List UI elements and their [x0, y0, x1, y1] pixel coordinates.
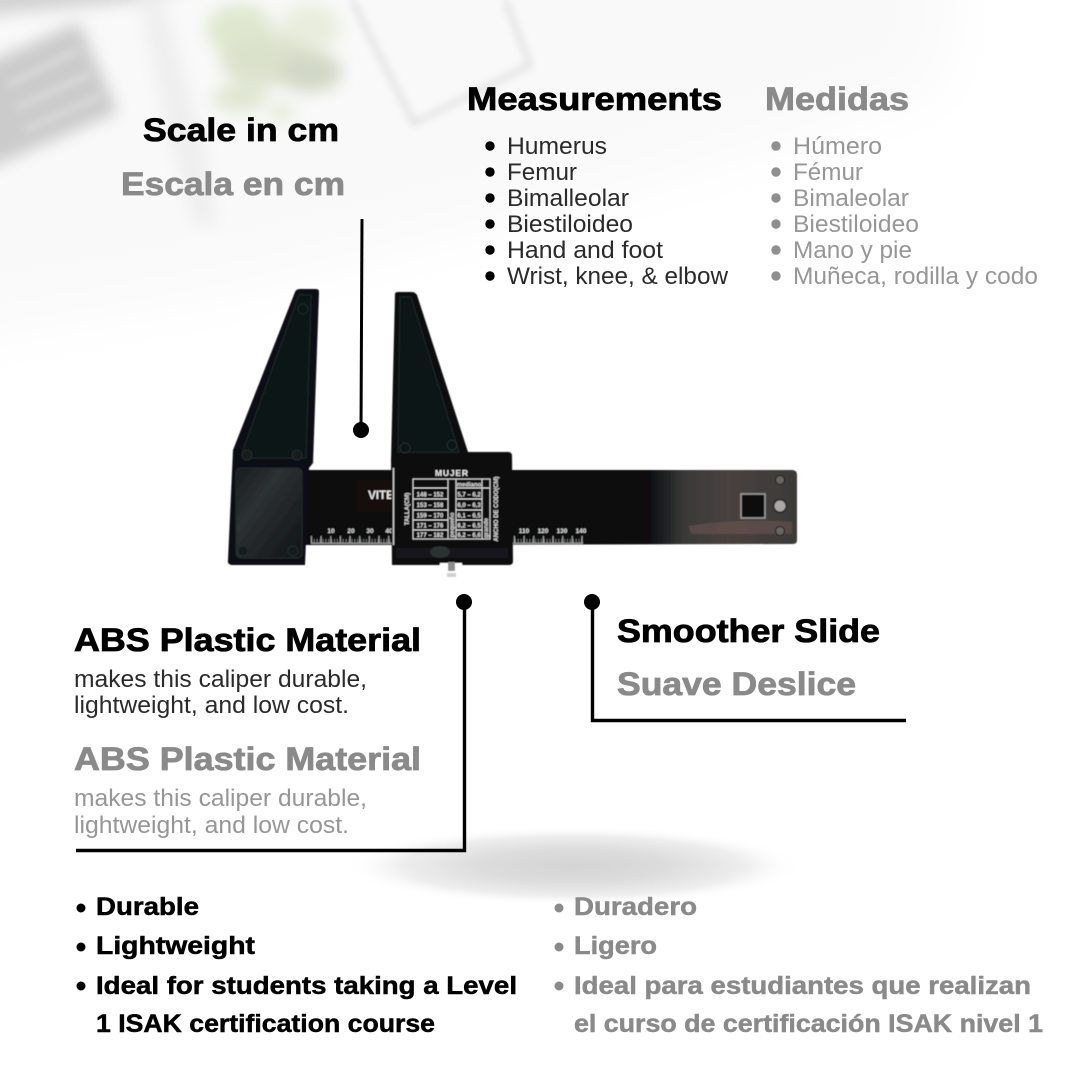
sliding jaw with size table: 6,0 – 6,3	[457, 503, 481, 509]
sliding jaw with size table: 177 – 182	[417, 533, 444, 539]
bullet list: benefits English: Ideal for students taking a Level	[96, 972, 517, 1000]
bullet list: benefits Spanish	[555, 893, 1043, 1038]
bullet list: benefits English: 1 ISAK certification course	[96, 1010, 435, 1038]
heading: Scale in cm: Escala en cm	[121, 166, 345, 202]
sliding jaw with size table: MUJER	[435, 468, 468, 478]
beam with scale: 130	[557, 528, 568, 535]
panel: measurements in Spanish: Fémur	[793, 159, 863, 186]
sliding jaw with size table: mediano	[457, 482, 482, 488]
arrow: ABS material pointer	[76, 594, 472, 850]
panel: measurements in Spanish: Húmero	[793, 133, 882, 160]
sliding jaw with size table: 171 – 176	[417, 524, 444, 530]
text block: ABS plastic material Spanish column	[74, 741, 421, 839]
sliding jaw with size table: 148 – 152	[417, 492, 444, 498]
bullet list: benefits English: Lightweight	[96, 932, 256, 960]
sliding jaw with size table: 159 – 170	[417, 514, 444, 520]
panel: measurements in English: Biestiloideo	[507, 211, 633, 238]
caliper photo	[228, 289, 797, 577]
bullet list: benefits English	[77, 893, 517, 1038]
beam with scale: 110	[519, 528, 530, 535]
heading: Smoother Slide: Suave Deslice	[617, 666, 856, 702]
beam with scale: 120	[538, 528, 549, 535]
sliding jaw with size table: 6,2 – 6,5	[457, 524, 481, 530]
panel: measurements in English: Bimalleolar	[507, 185, 629, 212]
panel: measurements in English: Measurements	[467, 81, 722, 117]
beam with scale: 40	[385, 528, 393, 535]
text block: ABS plastic material English: ABS Plastic Material	[74, 622, 421, 658]
beam with scale: 10	[327, 528, 335, 535]
beam with scale	[305, 470, 797, 545]
table-top shadow	[343, 826, 803, 906]
panel: measurements in Spanish: Biestiloideo	[793, 211, 919, 238]
bullet list: benefits English: Durable	[96, 893, 199, 921]
heading: Smoother Slide	[617, 613, 880, 702]
sliding jaw with size table: ANCHO DE CODO(CM)	[494, 476, 500, 542]
arrow: smoother slide pointer	[584, 594, 906, 720]
sliding jaw with size table: 6,2 – 6,6	[457, 533, 481, 539]
beam with scale: 20	[347, 528, 355, 535]
bullet list: benefits Spanish: Ideal para estudiantes que realizan	[574, 972, 1031, 1000]
arrow: scale pointer	[353, 219, 369, 438]
sliding jaw with size table: 5,7 – 6,2	[457, 492, 481, 498]
fixed jaw	[228, 289, 319, 565]
panel: measurements in English	[467, 81, 729, 290]
text block: ABS plastic material Spanish column: lightweight, and low cost.	[74, 812, 349, 839]
panel: measurements in Spanish: Muñeca, rodilla y codo	[793, 263, 1038, 290]
panel: measurements in English: Humerus	[507, 133, 607, 160]
panel: measurements in Spanish: Medidas	[765, 81, 909, 117]
sliding jaw with size table: TALLA(CM)	[405, 493, 411, 525]
text block: ABS plastic material Spanish column: makes this caliper durable,	[74, 785, 367, 812]
sliding jaw with size table: pequeño	[450, 512, 456, 538]
beam with scale: VITE	[368, 488, 394, 502]
beam with scale: 140	[576, 528, 587, 535]
bullet list: benefits Spanish: el curso de certificación ISAK nivel 1	[574, 1010, 1043, 1038]
sliding jaw with size table: 6,1 – 6,5	[457, 514, 481, 520]
text block: ABS plastic material Spanish column: ABS Plastic Material	[74, 741, 421, 777]
sliding jaw with size table: grande	[484, 517, 490, 538]
heading: Scale in cm: Scale in cm	[143, 112, 339, 148]
panel: measurements in Spanish: Mano y pie	[793, 237, 912, 264]
sliding jaw with size table	[391, 292, 513, 577]
text block: ABS plastic material English: makes this caliper durable,	[74, 666, 367, 693]
text block: ABS plastic material English: lightweight, and low cost.	[74, 692, 349, 719]
panel: measurements in Spanish	[765, 81, 1038, 290]
text block: ABS plastic material English	[74, 622, 421, 719]
beam with scale: 30	[366, 528, 374, 535]
panel: measurements in English: Wrist, knee, & elbow	[507, 263, 729, 290]
panel: measurements in Spanish: Bimaleolar	[793, 185, 909, 212]
bullet list: benefits Spanish: Ligero	[574, 932, 657, 960]
heading: Smoother Slide: Smoother Slide	[617, 613, 880, 649]
bullet list: benefits Spanish: Duradero	[574, 893, 697, 921]
heading: Scale in cm	[121, 112, 345, 202]
panel: measurements in English: Femur	[507, 159, 577, 186]
sliding jaw with size table: 153 – 158	[417, 503, 444, 509]
panel: measurements in English: Hand and foot	[507, 237, 663, 264]
